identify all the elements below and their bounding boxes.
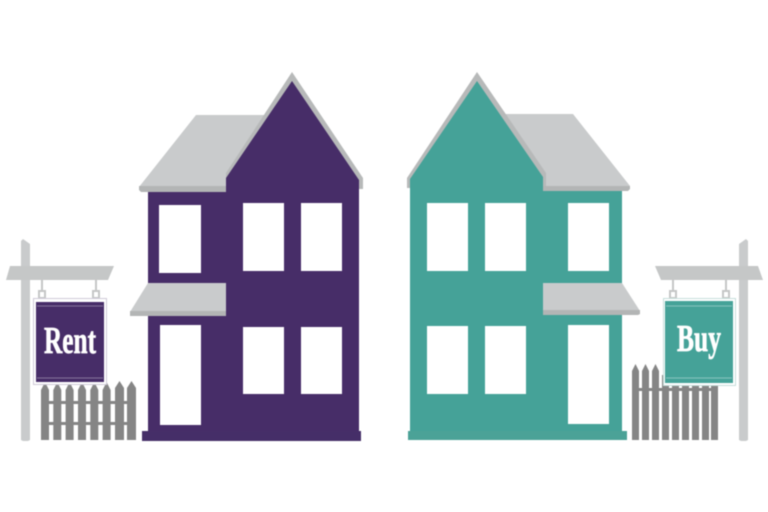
windows and door: purple house lower — [160, 325, 342, 425]
fence: left — [41, 381, 136, 440]
awning: purple house — [130, 283, 226, 316]
sign board — [664, 298, 736, 386]
post — [739, 239, 748, 441]
sign: buy — [655, 239, 763, 441]
hangers — [670, 279, 729, 298]
crossbar — [655, 266, 763, 280]
sign board — [34, 298, 106, 384]
base: teal house — [408, 431, 627, 440]
label: Buy: Buy — [677, 318, 721, 360]
windows: teal house upper — [427, 203, 609, 271]
roof: purple house — [139, 72, 363, 192]
sign: rent — [6, 239, 114, 441]
windows and door: teal house lower — [427, 325, 609, 424]
house body: teal — [410, 81, 622, 432]
base: purple house — [142, 431, 361, 441]
crossbar — [6, 266, 114, 280]
awning: teal house — [543, 283, 640, 315]
fence: right — [632, 364, 718, 440]
house body: purple — [148, 81, 359, 432]
panel: rent house — [130, 72, 363, 441]
roof: teal house — [407, 72, 630, 191]
post — [21, 239, 30, 441]
hangers — [39, 279, 99, 298]
panel: buy house — [407, 72, 640, 440]
windows: purple house upper — [159, 203, 342, 273]
label: Rent: Rent — [44, 320, 96, 362]
